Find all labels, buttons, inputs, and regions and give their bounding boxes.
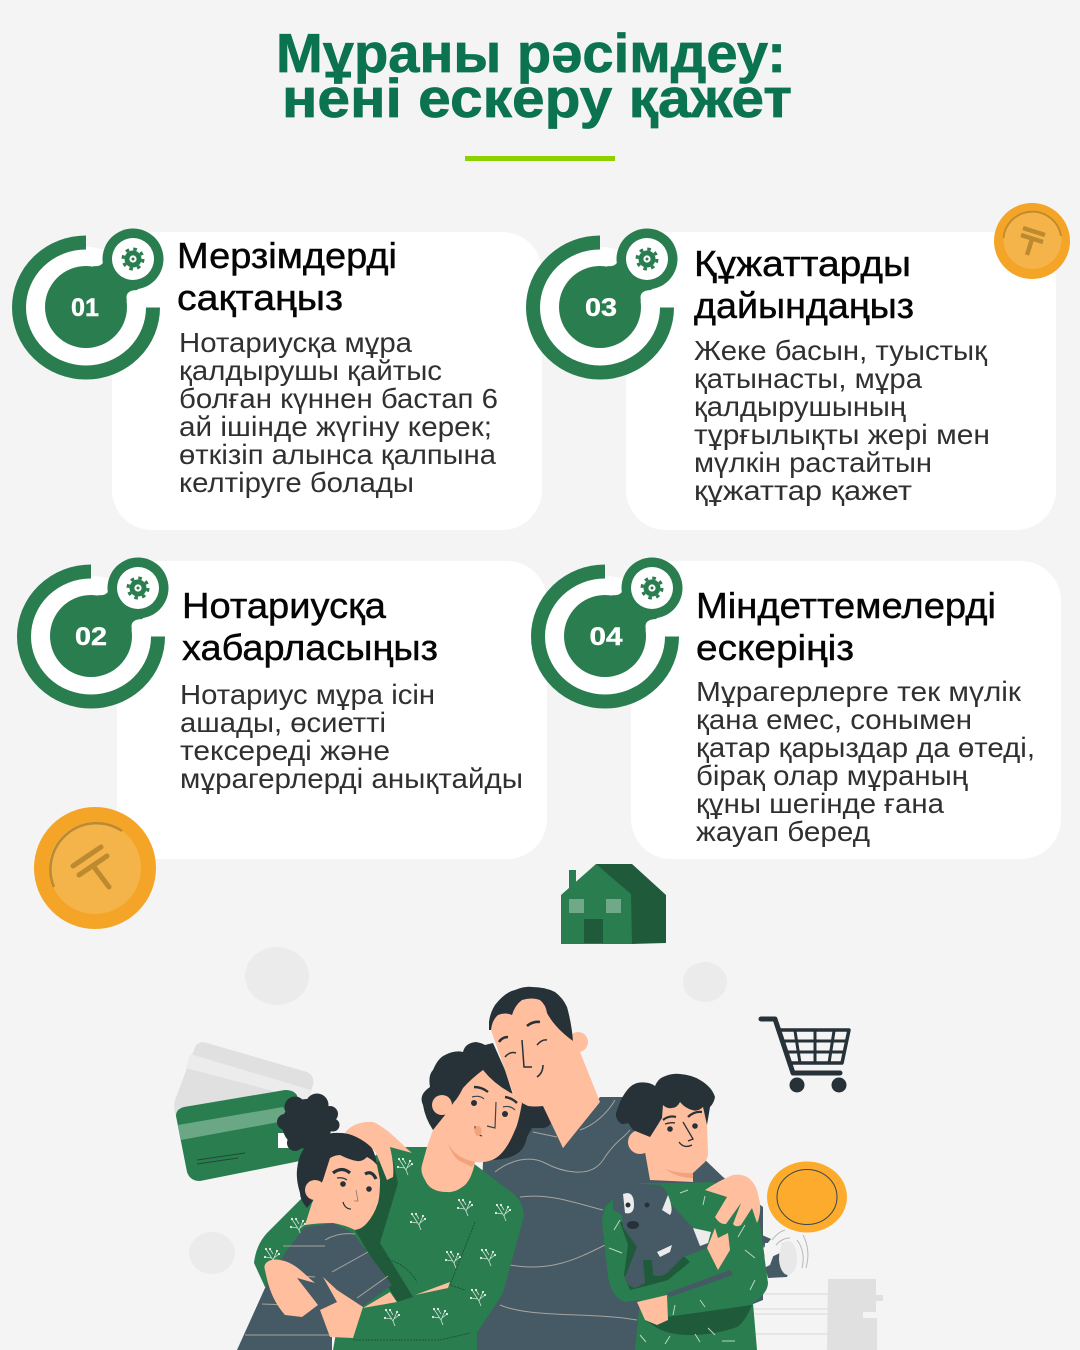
body text 02: Нотариус мұра ісін xyxy=(180,679,435,710)
body text 03: қатынасты, мұра xyxy=(694,363,923,394)
heading 03: Құжаттарды xyxy=(694,243,911,284)
man face xyxy=(491,998,600,1148)
heading 01 xyxy=(177,235,397,318)
heading 04: ескеріңіз xyxy=(696,627,854,668)
body text 04: жауап беред xyxy=(696,816,870,847)
icon: shopping cart xyxy=(761,1019,849,1092)
body text 04: құны шегінде ғана xyxy=(696,788,945,819)
body text 02: ашады, өсиетті xyxy=(180,707,386,738)
boy shirt ticks xyxy=(609,1190,755,1344)
badge 01: 01 xyxy=(71,294,99,322)
heading 02: хабарласыңыз xyxy=(182,627,438,668)
grey background furniture xyxy=(753,1279,883,1350)
badge 02: 02 xyxy=(75,623,107,651)
badge 02 xyxy=(24,558,168,702)
woman face xyxy=(421,1070,522,1192)
woman head xyxy=(421,1042,522,1192)
boy xyxy=(602,1074,808,1350)
girl body xyxy=(237,1223,392,1350)
panel: step 03 xyxy=(533,228,1056,530)
heading 04: Міндеттемелерді xyxy=(696,585,996,626)
decorative grey circles xyxy=(189,947,727,1274)
girl xyxy=(237,1094,412,1350)
body text 02: мұрагерлерді анықтайды xyxy=(180,763,523,794)
icon: tenge coin top right xyxy=(994,203,1070,279)
icon: tenge coin large xyxy=(34,807,156,929)
body text 04: қатар қарыздар да өтеді, xyxy=(696,732,1035,763)
dog xyxy=(613,1183,710,1288)
boy body xyxy=(602,1182,768,1350)
heading 04 xyxy=(696,585,996,668)
man's hand on shoulder xyxy=(705,1175,760,1226)
badge 03: 03 xyxy=(585,294,617,322)
body text 03: мүлкін растайтын xyxy=(694,447,932,478)
body text 01: Нотариусқа мұра xyxy=(179,327,413,358)
body text 04: бірақ олар мұраның xyxy=(696,760,968,791)
dog tail xyxy=(758,1207,808,1278)
body text 01: келтіруге болады xyxy=(179,467,414,498)
woman hair xyxy=(422,1042,513,1130)
body text 04 xyxy=(696,676,1035,847)
body text 03: Жеке басын, туыстық xyxy=(694,335,988,366)
boy head xyxy=(628,1130,652,1154)
body text 02: тексереді және xyxy=(180,735,390,766)
body text 01: ай ішінде жүгіну керек; xyxy=(179,411,492,442)
body text 02 xyxy=(180,679,523,794)
title underline xyxy=(465,156,615,161)
boy's thumb xyxy=(707,1228,730,1270)
icon: house xyxy=(561,864,666,944)
body text 03: қалдырушының xyxy=(694,391,906,422)
badge 04 xyxy=(538,558,682,702)
body text 04: қана емес, сонымен xyxy=(696,704,972,735)
body text 01 xyxy=(179,327,498,498)
title xyxy=(276,22,792,129)
heading 02 xyxy=(182,585,438,668)
shirt shadow xyxy=(355,1147,413,1302)
boy hair xyxy=(616,1074,715,1137)
icon: credit cards xyxy=(174,1042,313,1181)
body text 01: болған күннен бастап 6 xyxy=(179,383,498,414)
girl hair bun xyxy=(277,1094,340,1151)
girl face xyxy=(305,1155,380,1230)
body text 03 xyxy=(694,335,990,506)
body text 03: құжаттар қажет xyxy=(694,475,912,506)
hands embracing xyxy=(264,1259,450,1338)
body text 01: қалдырушы қайтыс xyxy=(179,355,442,386)
woman body xyxy=(254,1147,524,1350)
body text 01: өткізіп алынса қалпына xyxy=(179,439,497,470)
body text 04: Мұрагерлерге тек мүлік xyxy=(696,676,1022,707)
heading 03 xyxy=(694,243,914,326)
title: Мұраны рәсімдеу: xyxy=(276,22,786,84)
panel: step 02 xyxy=(24,558,547,859)
illustration: family xyxy=(237,987,808,1350)
woman back hair xyxy=(490,1095,552,1160)
heading 01: Мерзімдерді xyxy=(177,235,397,276)
girl hair xyxy=(297,1133,377,1208)
sprigs xyxy=(264,1158,511,1326)
body text 03: тұрғылықты жері мен xyxy=(694,419,990,450)
panel: step 01 xyxy=(19,228,542,530)
woman's hand on head xyxy=(345,1122,412,1180)
icon: gold coin xyxy=(767,1162,847,1232)
man hair xyxy=(489,987,573,1042)
heading 01: сақтаңыз xyxy=(177,277,343,318)
badge 04: 04 xyxy=(590,623,623,651)
badge 01 xyxy=(19,228,164,372)
man body xyxy=(475,1097,763,1350)
heading 03: дайындаңыз xyxy=(694,285,914,326)
heading 02: Нотариусқа xyxy=(182,585,387,626)
man head xyxy=(489,987,600,1148)
badge 03 xyxy=(533,228,678,372)
dog shadow xyxy=(620,1222,690,1290)
title: нені ескеру қажет xyxy=(282,67,792,129)
panel: step 04 xyxy=(538,558,1061,859)
